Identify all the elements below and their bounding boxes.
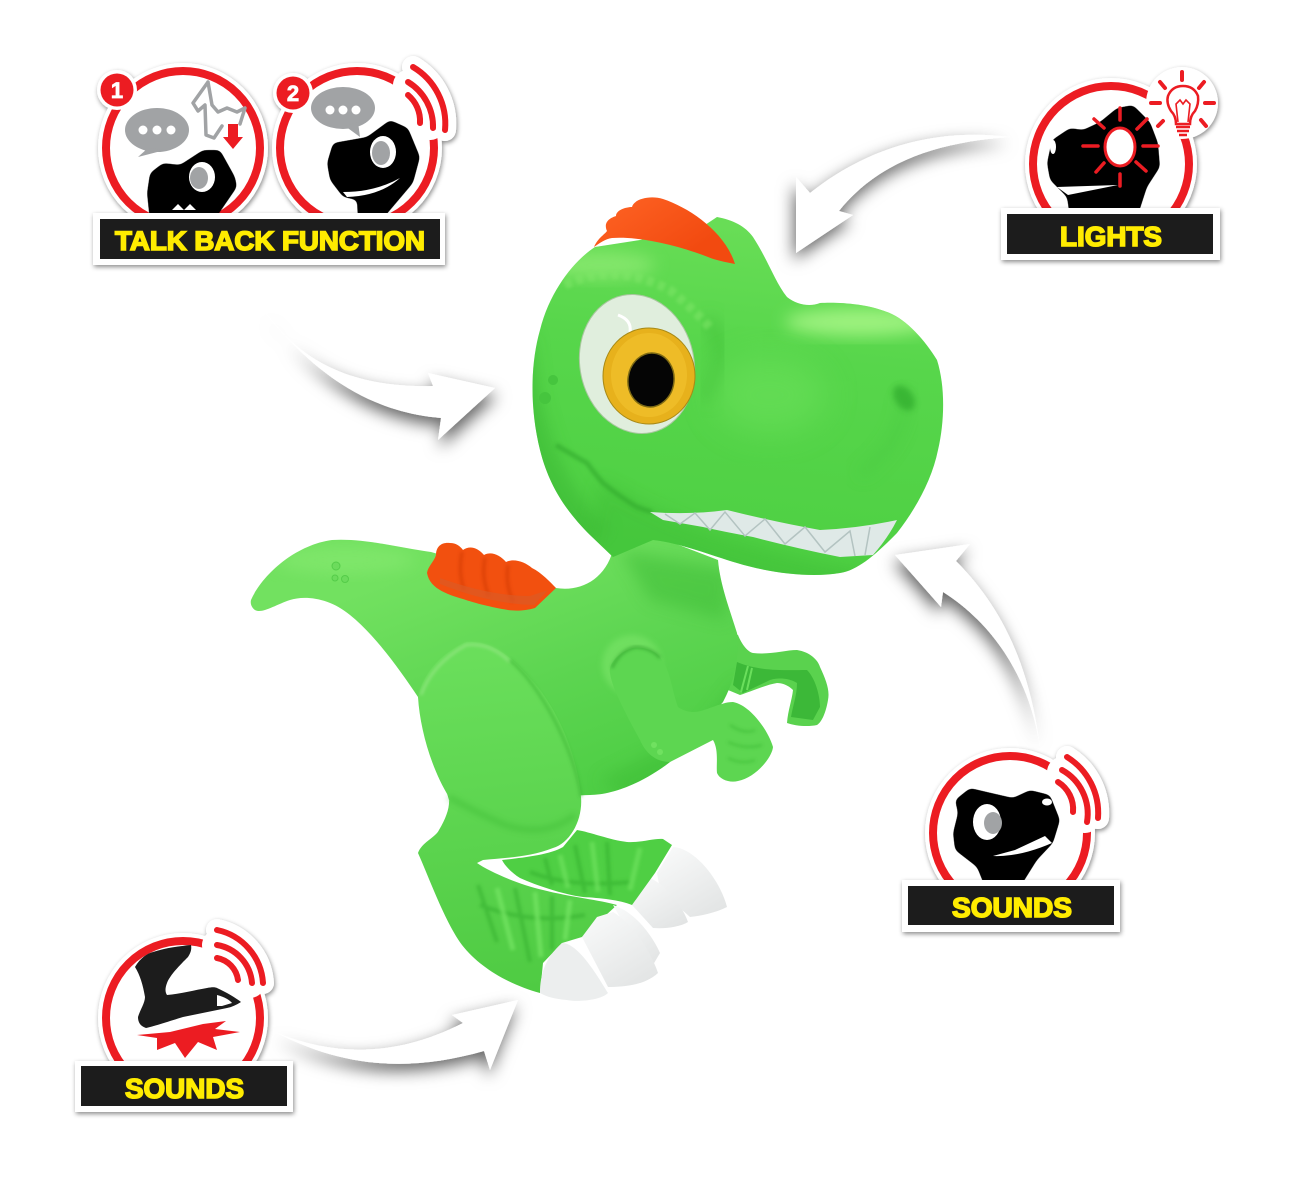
number 1: 1	[111, 78, 123, 103]
sound waves	[217, 930, 263, 983]
dino head roaring	[953, 788, 1060, 892]
roar circle	[925, 748, 1098, 918]
near leg and thigh	[418, 642, 617, 993]
badge: sounds (stomp)	[75, 930, 293, 1112]
body and tail	[251, 530, 738, 800]
stomp circle	[98, 930, 268, 1103]
tail bumps	[332, 562, 348, 582]
speech bubble step 1	[125, 108, 189, 157]
label: sounds left: SOUNDS	[125, 1073, 244, 1104]
label: talk back function	[93, 213, 445, 265]
badge: lights	[1001, 67, 1220, 260]
dino head step 1	[147, 150, 237, 222]
sound waves step 2	[408, 67, 445, 130]
label: lights	[1001, 208, 1220, 260]
front foot claws	[540, 905, 660, 1001]
orange crest button	[594, 197, 735, 264]
arrow: talk back function to head	[265, 312, 495, 440]
foot silhouette	[135, 945, 241, 1028]
dinosaur toy	[251, 197, 943, 1001]
label: talk back function: TALK BACK FUNCTION	[115, 226, 425, 256]
infographic canvas	[72, 55, 1224, 1118]
head	[532, 197, 944, 575]
step 2 circle	[272, 63, 445, 233]
pointing hand	[193, 82, 245, 138]
light bulb icon	[1151, 72, 1214, 135]
arrow: foot sounds to claw	[277, 1000, 518, 1070]
gap between legs	[484, 861, 501, 875]
body shading	[275, 546, 750, 810]
dino head step 2	[327, 120, 420, 222]
label: lights: LIGHTS	[1060, 221, 1162, 252]
back spike button	[427, 543, 556, 611]
near arm	[602, 635, 773, 782]
label: sounds right: SOUNDS	[952, 892, 1072, 923]
far arm	[728, 630, 829, 726]
arrow: sounds to mouth	[895, 544, 1040, 747]
red down arrow	[223, 124, 243, 149]
head shading	[500, 251, 935, 600]
eye	[567, 284, 707, 444]
head shape	[532, 217, 943, 575]
teeth	[650, 510, 897, 557]
speech bubble step 2	[311, 87, 375, 137]
back foot	[502, 830, 672, 905]
foot scales	[478, 885, 585, 962]
sound waves	[1058, 757, 1098, 822]
badge: talk back function	[93, 63, 445, 265]
badge: sounds (roar)	[902, 748, 1120, 932]
mouth smile line	[556, 445, 652, 512]
label: sounds right	[902, 880, 1120, 932]
dino head with light	[1047, 105, 1160, 218]
lights circle	[1025, 67, 1218, 250]
number 2: 2	[287, 81, 299, 106]
step 1 circle	[97, 63, 268, 233]
arrow: lights to crest	[796, 135, 1010, 253]
label: sounds left	[75, 1061, 293, 1112]
back foot claws	[632, 847, 727, 928]
impact star	[137, 1021, 240, 1058]
